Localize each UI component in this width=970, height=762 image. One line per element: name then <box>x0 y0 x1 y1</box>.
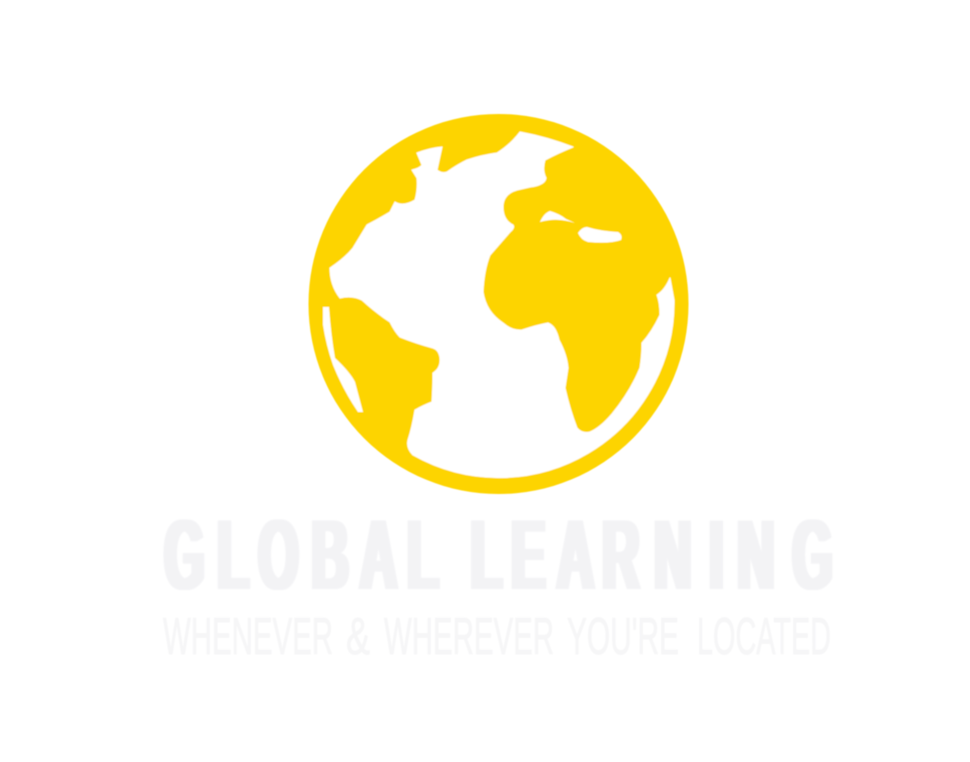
left white sliver <box>323 307 363 412</box>
icon: yellow globe <box>308 114 688 494</box>
tagline: & <box>346 608 370 666</box>
tagline: YOU'RE <box>567 608 679 666</box>
tagline <box>163 608 831 666</box>
mediterranean white shapes <box>540 211 575 223</box>
tagline: WHEREVER <box>384 608 554 666</box>
tagline: WHENEVER <box>163 608 333 666</box>
oceans and the Americas in white <box>330 132 674 478</box>
heading: GLOBAL LEARNING: GLOBAL LEARNING <box>164 500 833 610</box>
tagline: LOCATED <box>697 608 831 666</box>
